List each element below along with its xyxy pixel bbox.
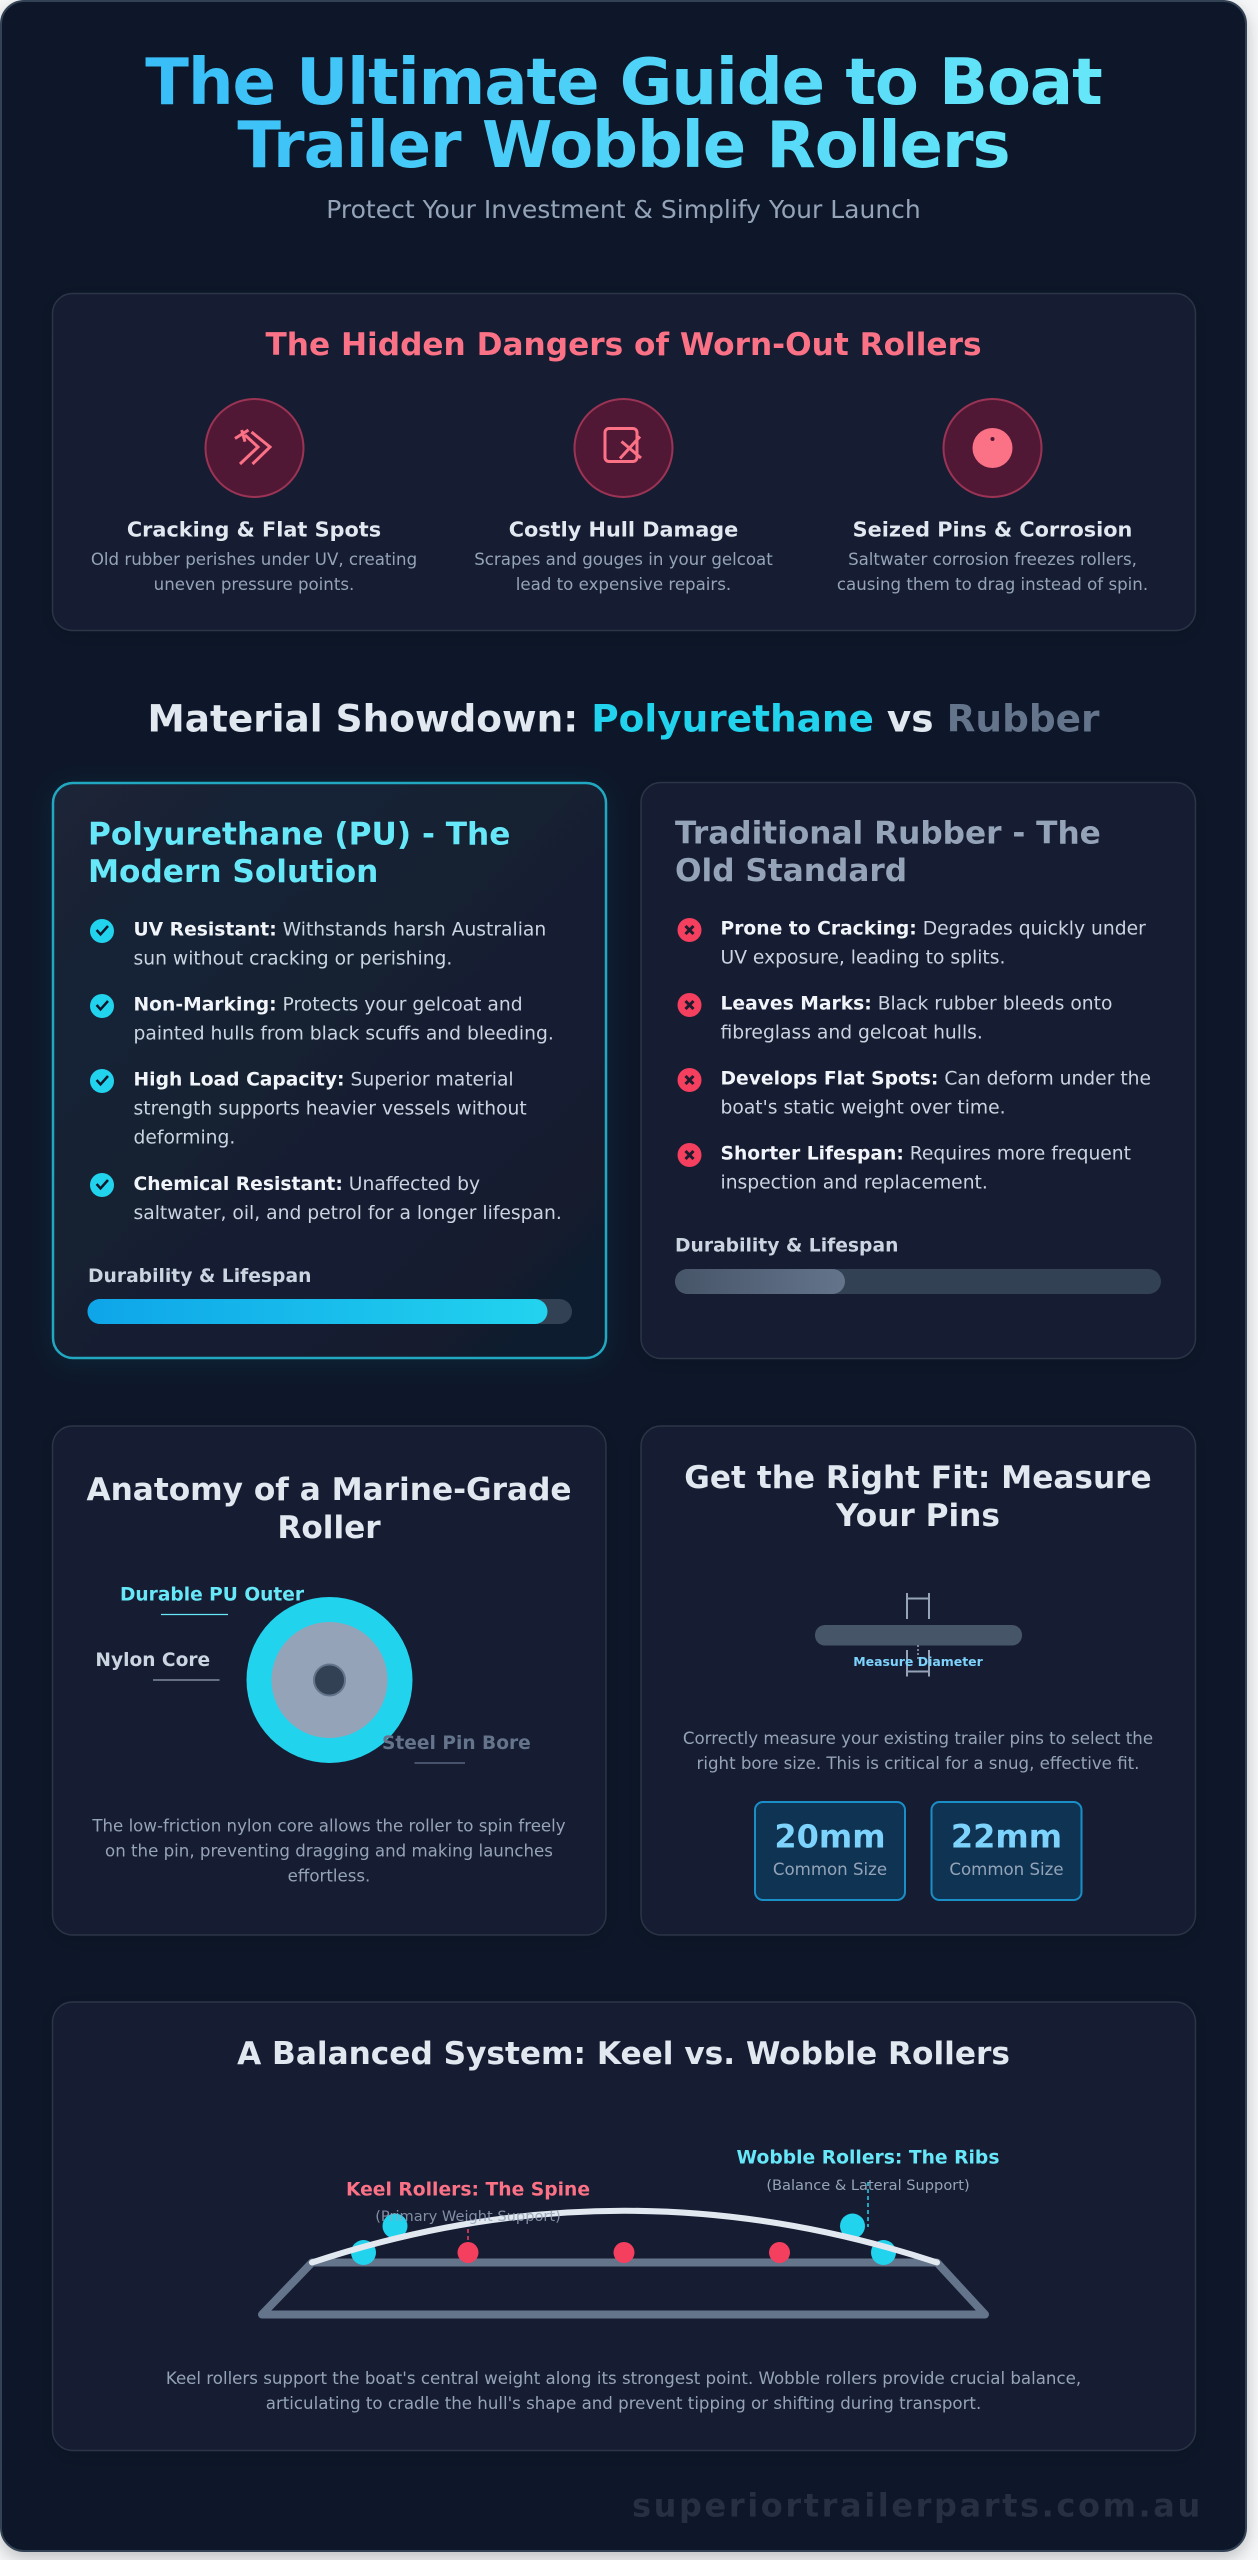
callout: wobble rollers: Wobble Rollers: The Ribs: [737, 2147, 999, 2168]
benefit: UV resistant: [134, 920, 546, 970]
hull: [312, 2211, 937, 2262]
callout: keel rollers: [346, 2180, 590, 2242]
item description: [91, 550, 417, 594]
benefit: UV resistant: UV Resistant: Withstands harsh Australian: [134, 920, 546, 941]
panel description: on the pin, preventing dragging and making launches: [105, 1842, 553, 1861]
drawback: shorter lifespan: Shorter Lifespan: Requires more frequent: [720, 1143, 1131, 1164]
drawback: prone to cracking: Prone to Cracking: Degrades quickly under: [720, 919, 1146, 940]
icon: cross: [678, 1143, 702, 1167]
panel: polyurethane: [53, 783, 606, 1358]
heading: hidden dangers: The Hidden Dangers of Worn-Out Rollers: [265, 327, 982, 363]
label: PU outer: Durable PU Outer: [120, 1585, 305, 1606]
item description: lead to expensive repairs.: [516, 575, 731, 594]
drawback: leaves marks: fibreglass and gelcoat hulls.: [720, 1023, 983, 1044]
panel: anatomy: [52, 1426, 606, 1935]
durability label: Durability & Lifespan: [675, 1235, 898, 1256]
pin measurement diagram: [815, 1593, 1022, 1676]
title: The Ultimate Guide to Boat: [145, 46, 1102, 120]
icon: check: [90, 1173, 114, 1197]
benefit: high load capacity: strength supports heavier vessels without: [134, 1099, 527, 1120]
callout: wobble rollers: [737, 2147, 999, 2227]
size box: 22mm: Common Size: [949, 1860, 1064, 1879]
pin measurement diagram: Measure Diameter: [853, 1654, 984, 1669]
item heading: Seized Pins & Corrosion: [853, 518, 1132, 542]
benefit: non-marking: Non-Marking: Protects your gelcoat and: [134, 995, 523, 1016]
label: nylon core: [95, 1650, 220, 1680]
panel description: right bore size. This is critical for a snug, effective fit.: [697, 1754, 1139, 1773]
heading: material showdown: Material Showdown: Polyurethane vs Rubber: [148, 696, 1100, 740]
panel heading: Roller: [277, 1510, 381, 1546]
item description: Scrapes and gouges in your gelcoat: [474, 550, 773, 569]
wobble rollers: [351, 2214, 896, 2265]
panel: hidden dangers: [52, 294, 1196, 630]
panel heading: [675, 816, 1101, 889]
benefit: chemical resistant: saltwater, oil, and petrol for a longer lifespan.: [134, 1203, 562, 1224]
icon: check: [90, 994, 114, 1018]
drawback: shorter lifespan: [720, 1143, 1131, 1193]
drawback: leaves marks: Leaves Marks: Black rubber bleeds onto: [720, 994, 1112, 1015]
callout: keel rollers: Keel Rollers: The Spine: [346, 2180, 590, 2201]
watermark: superiortrailerparts.com.au: [632, 2486, 1203, 2524]
panel heading: [86, 1472, 572, 1546]
keel rollers: [458, 2242, 790, 2263]
drawback: shorter lifespan: inspection and replacement.: [720, 1172, 988, 1193]
drawback: flat spots: [720, 1069, 1151, 1119]
benefit: chemical resistant: Chemical Resistant: Unaffected by: [134, 1174, 480, 1195]
panel description: Keel rollers support the boat's central weight along its strongest point. Wobble rollers provide crucial balance,: [166, 2369, 1081, 2388]
icon: check: [90, 919, 114, 943]
panel heading: [684, 1460, 1152, 1534]
panel description: Correctly measure your existing trailer pins to select the: [683, 1729, 1153, 1748]
panel: balanced system: [52, 2002, 1196, 2450]
panel: right fit: [641, 1426, 1196, 1935]
roller cross-section: [246, 1597, 412, 1763]
icon: cross: [678, 993, 702, 1017]
benefit: non-marking: painted hulls from black scuffs and bleeding.: [134, 1024, 554, 1045]
title: Trailer Wobble Rollers: [237, 109, 1010, 183]
item description: Old rubber perishes under UV, creating: [91, 550, 417, 569]
drawback: flat spots: boat's static weight over time.: [720, 1098, 1006, 1119]
panel heading: Get the Right Fit: Measure: [684, 1460, 1152, 1496]
label: nylon core: Nylon Core: [95, 1650, 210, 1671]
trailer frame: [262, 2262, 985, 2314]
icon: cracked chevrons: [206, 399, 304, 497]
benefit: high load capacity: deforming.: [134, 1128, 235, 1149]
benefit: high load capacity: [134, 1070, 527, 1149]
panel heading: Anatomy of a Marine-Grade: [86, 1472, 572, 1508]
item: seized pins: [837, 399, 1148, 594]
item: hull damage: [474, 399, 773, 594]
panel description: [91, 1817, 566, 1886]
drawback: flat spots: Develops Flat Spots: Can deform under the: [720, 1069, 1151, 1090]
panel: rubber: [641, 782, 1196, 1358]
panel heading: [88, 816, 510, 890]
panel heading: Polyurethane (PU) - The: [88, 816, 510, 852]
size box: 22mm: [932, 1802, 1082, 1900]
size box: 20mm: 20mm: [774, 1818, 886, 1856]
panel heading: Your Pins: [835, 1498, 1000, 1534]
trailer and hull diagram: [262, 2211, 985, 2314]
size box: 22mm: 22mm: [951, 1818, 1062, 1856]
icon: seized pin: [944, 399, 1042, 497]
item description: uneven pressure points.: [154, 575, 354, 594]
panel heading: Traditional Rubber - The: [675, 816, 1101, 852]
item description: [474, 550, 773, 594]
panel heading: A Balanced System: Keel vs. Wobble Rollers: [237, 2036, 1010, 2072]
callout: keel rollers: (Primary Weight Support): [375, 2208, 561, 2225]
icon: cross: [678, 1068, 702, 1092]
icon: cross: [678, 918, 702, 942]
callout: wobble rollers: (Balance & Lateral Support): [766, 2177, 970, 2194]
panel description: The low-friction nylon core allows the roller to spin freely: [91, 1817, 566, 1836]
durability bar: rubber: [675, 1269, 1161, 1294]
panel heading: Old Standard: [675, 853, 907, 889]
item description: [837, 550, 1148, 594]
title: [145, 46, 1102, 183]
benefit: high load capacity: High Load Capacity: Superior material: [134, 1070, 514, 1091]
panel description: [683, 1729, 1153, 1773]
label: steel pin bore: Steel Pin Bore: [382, 1733, 531, 1754]
benefit: chemical resistant: [134, 1174, 562, 1224]
size box: 20mm: [755, 1802, 905, 1900]
subtitle: Protect Your Investment & Simplify Your Launch: [326, 195, 921, 224]
panel description: effortless.: [288, 1867, 370, 1886]
panel heading: Modern Solution: [88, 854, 378, 890]
benefit: UV resistant: sun without cracking or perishing.: [134, 949, 452, 970]
icon: check: [90, 1069, 114, 1093]
item heading: Costly Hull Damage: [509, 518, 738, 542]
size box: 20mm: Common Size: [773, 1860, 887, 1879]
drawback: prone to cracking: UV exposure, leading to splits.: [720, 948, 1005, 969]
panel description: articulating to cradle the hull's shape and prevent tipping or shifting during transport.: [266, 2394, 981, 2413]
durability bar: polyurethane: [88, 1299, 572, 1324]
panel description: [166, 2369, 1081, 2413]
item heading: Cracking & Flat Spots: [127, 518, 381, 542]
benefit: non-marking: [134, 995, 554, 1045]
item description: causing them to drag instead of spin.: [837, 575, 1148, 594]
icon: damaged hull: [574, 399, 672, 497]
drawback: leaves marks: [720, 994, 1112, 1044]
durability label: Durability & Lifespan: [88, 1266, 311, 1287]
item description: Saltwater corrosion freezes rollers,: [848, 550, 1137, 569]
item: cracking and flat spots: [91, 399, 417, 594]
drawback: prone to cracking: [720, 919, 1146, 969]
